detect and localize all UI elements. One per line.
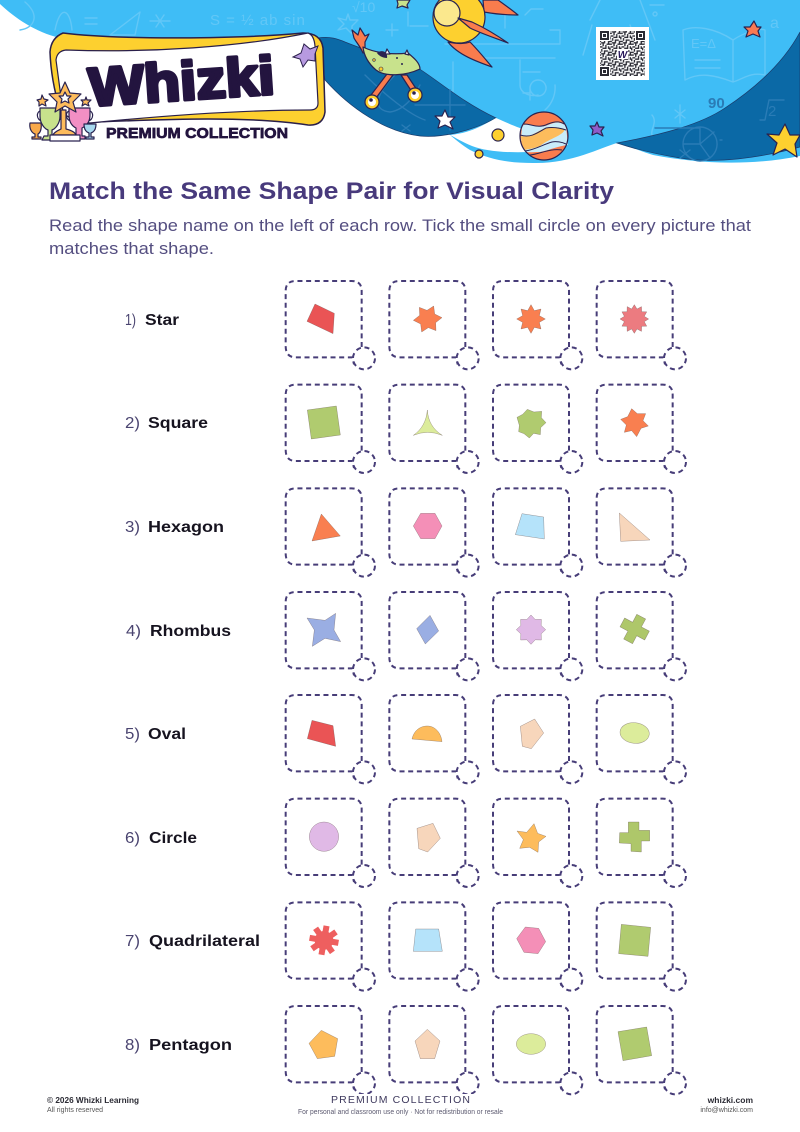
label: Oval — [125, 726, 186, 743]
options: Circle — [286, 799, 686, 887]
option: pink hexagon — [493, 902, 582, 991]
option: lilac eight-point star — [493, 592, 582, 680]
logo subtitle: PREMIUM COLLECTION — [106, 126, 288, 142]
options: Pentagon — [286, 1006, 686, 1094]
label: Square: Square — [148, 415, 208, 432]
title: Match the Same Shape Pair for Visual Clarity — [49, 178, 614, 205]
option: green plus — [597, 799, 686, 887]
instructions — [49, 216, 751, 258]
icon: big yellow star — [767, 124, 800, 157]
instructions: matches that shape. — [49, 239, 214, 258]
option: orange pentagon — [286, 1006, 375, 1094]
label: Star: Star — [145, 312, 179, 329]
options: Quadrilateral — [286, 902, 686, 991]
icon: red star — [744, 21, 761, 37]
option: green plus — [597, 592, 686, 680]
option: blue trapezoid — [389, 902, 479, 991]
label: Circle — [125, 830, 197, 847]
dark blue wave right — [617, 32, 800, 160]
label: Star — [125, 312, 179, 329]
label: Rhombus: Rhombus — [150, 623, 231, 640]
icon: white star — [435, 110, 455, 129]
label: Star: 1) — [125, 312, 136, 329]
label: Oval: 5) — [125, 726, 140, 743]
icon: small yellow dots — [475, 129, 504, 158]
option: red quadrilateral — [286, 281, 375, 369]
option: seven-point star — [493, 385, 582, 473]
option: eight-point star — [493, 281, 582, 369]
QR code: W — [618, 50, 629, 61]
option: pink hexagon — [389, 488, 479, 577]
option: six-point star — [389, 281, 479, 369]
footer centre: For personal and classroom use only · Not for redistribution or resale — [298, 1109, 503, 1116]
option: red quadrilateral — [286, 695, 375, 783]
white swoosh — [450, 118, 530, 152]
logo yellow frame — [50, 33, 325, 125]
math doodles on light blue: S = ½ ab sin — [210, 12, 306, 29]
icon: purple small star — [590, 122, 604, 136]
row 3: Hexagon — [125, 488, 686, 577]
icon: green monster — [352, 28, 422, 109]
label: Quadrilateral: Quadrilateral — [149, 933, 260, 950]
label: Oval: Oval — [148, 726, 186, 743]
logo — [30, 33, 325, 142]
options: Rhombus — [286, 592, 686, 680]
footer right — [700, 1095, 753, 1114]
option: orange star — [493, 799, 582, 887]
footer left — [47, 1095, 139, 1114]
option: orange semicircle — [389, 695, 479, 783]
footer centre — [298, 1094, 503, 1116]
label: Rhombus: 4) — [126, 623, 141, 640]
logo wordmark: Whizki — [87, 46, 276, 118]
footer — [47, 1094, 753, 1118]
option: green oval — [493, 1006, 582, 1094]
row 6: Circle — [125, 799, 686, 887]
math doodles on light blue — [20, 0, 779, 139]
option: six-point star — [597, 385, 686, 473]
option: red asterisk — [286, 902, 375, 991]
footer centre: PREMIUM COLLECTION — [331, 1094, 470, 1106]
instructions: Read the shape name on the left of each row. Tick the small circle on every picture that — [49, 216, 751, 235]
header banner — [0, 0, 800, 163]
footer left: © 2026 Whizki Learning — [47, 1095, 139, 1105]
footer left: All rights reserved — [47, 1107, 103, 1114]
math doodles on light blue: a — [770, 15, 779, 32]
option: lilac circle — [286, 799, 375, 887]
option: blue quadrilateral — [493, 488, 582, 577]
option: peach pentagon — [389, 799, 479, 887]
label: Square: 2) — [125, 415, 140, 432]
label: Pentagon — [125, 1037, 232, 1054]
row 1: Star — [125, 281, 686, 369]
icon: purple star on logo — [293, 44, 318, 67]
light blue wave — [0, 0, 800, 163]
doodles on dark blue: 2 — [768, 103, 776, 120]
dark blue wave left — [318, 37, 496, 136]
QR code — [596, 27, 649, 80]
option: green square — [597, 902, 686, 991]
option: green oval — [597, 695, 686, 783]
option: peach pentagon — [493, 695, 582, 783]
option: peach triangle — [597, 488, 686, 577]
options: Square — [286, 385, 686, 473]
label: Circle: 6) — [125, 830, 140, 847]
math doodles on light blue: 13 — [537, 122, 555, 139]
options: Hexagon — [286, 488, 686, 577]
options: Star — [286, 281, 686, 369]
icon: trophies — [30, 82, 96, 141]
logo white panel — [56, 33, 318, 123]
footer right: info@whizki.com — [700, 1107, 753, 1114]
option: blue rhombus — [389, 592, 479, 680]
row 5: Oval — [125, 695, 686, 783]
icon: top star — [397, 0, 410, 8]
row 4: Rhombus — [126, 592, 686, 680]
math doodles on light blue: E=Δ — [691, 36, 716, 51]
option: curved triangle — [389, 385, 479, 473]
option: green square — [286, 385, 375, 473]
row 8: Pentagon — [125, 1006, 686, 1094]
label: Pentagon: 8) — [125, 1037, 140, 1054]
icon: yellow rocket planet — [433, 0, 518, 67]
option: orange triangle — [286, 488, 375, 577]
label: Circle: Circle — [149, 830, 197, 847]
option: twelve-point star — [597, 281, 686, 369]
label: Hexagon: Hexagon — [148, 519, 224, 536]
footer right: whizki.com — [707, 1095, 753, 1105]
label: Hexagon — [125, 519, 224, 536]
icon: planet — [520, 112, 568, 160]
option: peach pentagon — [389, 1006, 479, 1094]
label: Pentagon: Pentagon — [149, 1037, 232, 1054]
option: four-point star — [286, 592, 375, 680]
label: Square — [125, 415, 208, 432]
doodles on dark blue — [365, 75, 784, 161]
option: green square — [597, 1006, 686, 1094]
options: Oval — [286, 695, 686, 783]
label: Hexagon: 3) — [125, 519, 140, 536]
doodles on dark blue: 90 — [708, 95, 725, 112]
label: Quadrilateral: 7) — [125, 933, 140, 950]
row 7: Quadrilateral — [125, 902, 686, 991]
row 2: Square — [125, 385, 686, 473]
